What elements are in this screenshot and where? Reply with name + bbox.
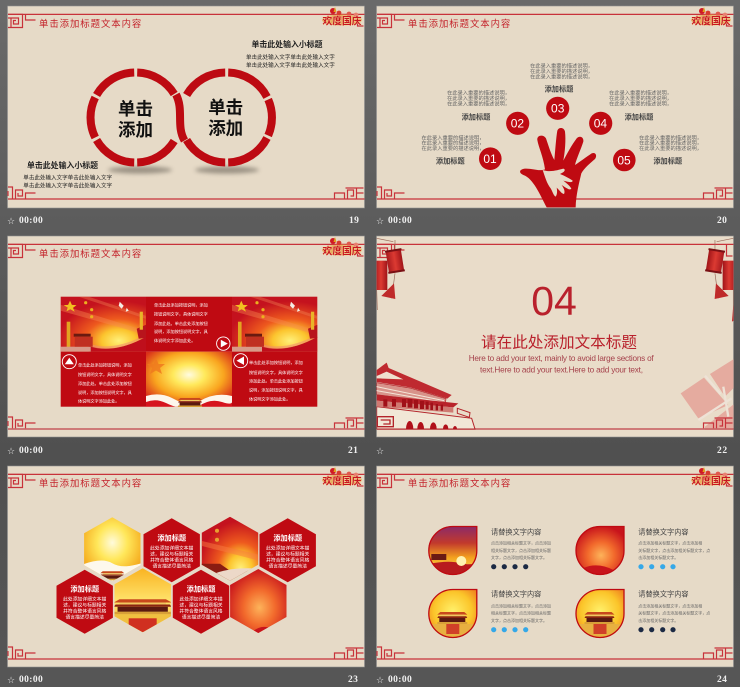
caption: ☆ [376,676,384,686]
text block 1: 点击添加相关标题文字，点击添加 [491,540,551,546]
step 03: 03 [551,102,565,116]
callout top right: 单击此处输入文字单击此处输入文字 [246,55,335,61]
icon: hand [520,128,596,207]
section description: text.Here to add your text.Here to add your text, [480,365,643,374]
frame border [377,474,734,659]
text block 4: 请替换文字内容 [638,590,689,598]
panel: slide 20 hand [376,6,734,227]
text block 1: 请替换文字内容 [491,528,541,536]
step 01 [479,147,502,170]
text cell top [146,297,232,352]
step 04: 04 [594,116,607,130]
ring 1 label: 添加 [118,120,153,140]
callout bottom left: 单击此处输入文字单击此处输入文字 [23,182,113,190]
hexagon text 2: 添加标题 [273,533,302,542]
frame border [8,474,364,659]
hexagon text 4: 添加标题 [187,585,215,594]
hexagon text 3: 此处添加详细文本描 [63,598,106,603]
star: ☆ [376,447,384,457]
step 02: 02 [511,116,524,130]
image center sun [146,352,232,407]
logo [322,7,362,28]
callout top right: 单击此处输入小标题 [252,39,323,49]
step 01: 01 [483,152,497,166]
text block 01: 在此录入重要的描述说明， [422,138,484,146]
caption [376,675,727,686]
text block 1: 相关标题文字，点击添加相关标题 [491,547,551,553]
text block 03: 在此录入重要的描述说明， [530,72,593,80]
text block 3: 请替换文字内容 [491,590,541,598]
caption [376,216,727,227]
step 04 [589,112,612,135]
callout bottom left: 单击此处输入文字单击此处输入文字 [23,176,112,182]
caption: ☆ [7,217,15,227]
text cell right: 说明，添加按钮说明文字，具 [249,386,303,392]
panel: slide 21 image grid [7,236,364,457]
image left [61,297,146,352]
text block 2: 关标题文字，点击添加相关标题文字，点 [638,547,710,553]
text cell top: 单击此处添加按钮说明，添加 [154,302,208,308]
drop image 4 [576,589,624,638]
title: 单击添加标题文本内容 [39,248,142,259]
hexagon text 1: 语言描述尽量简洁 [153,562,191,569]
text block 3: 相关标题文字，点击添加相关标题 [491,610,551,616]
text block 04: 在此录入重要的描述说明， [609,100,672,108]
caption [7,675,358,686]
hexagon text 4: 并符合整体语言风格 [179,608,223,615]
text block 02: 在此录入重要的描述说明， [447,90,510,96]
drop image 2 [576,526,624,575]
caption: 00:00 [19,216,43,226]
hexagon image 2 [201,516,259,582]
text cell left: 单击此处添加按钮说明，添加 [78,362,132,368]
text block 04: 在此录入重要的描述说明， [609,94,672,102]
hexagon text 1: 并符合整体语言风格 [150,556,193,563]
hexagon image 3 [114,567,172,633]
social icons 4 [638,627,676,632]
step 05 [613,149,636,171]
ring 2 label: 添加 [208,118,243,138]
text cell top: 说明，添加按钮说明文字，具 [154,328,208,334]
section heading: 请在此处添加文本标题 [481,334,637,352]
hexagon text 4: 述，建议与标题相关 [179,602,223,609]
caption: 24 [717,675,727,685]
callout bottom left: 单击此处输入小标题 [27,160,98,170]
social icons 2 [638,564,676,569]
illustration: Tiananmen gate [377,363,475,429]
text cell right: 体说明文字添加此处。 [249,396,290,402]
text block 2 [638,528,710,560]
text block 01: 在此录入重要的描述说明， [422,136,484,142]
label 03: 添加标题 [545,84,573,94]
step 05: 05 [617,153,631,167]
hexagon text 2 [260,518,316,582]
text block 2: 击添加相关标题文字。 [638,554,678,560]
text cell left [61,352,146,407]
panel: slide 23 hexagons [7,466,364,686]
text block 02: 在此录入重要的描述说明， [447,94,510,102]
icon: right arrow [217,337,230,350]
text block 01: 在此录入重要的描述说明， [422,144,484,152]
title: 单击添加标题文本内容 [408,18,511,29]
hexagon text 2: 述，建议与标题相关 [266,550,309,557]
title: 单击添加标题文本内容 [39,18,142,29]
text block 1: 文字，点击添加相关标题文字。 [491,554,547,560]
text block 4 [638,590,710,623]
panel: slide 22 section title [375,236,735,457]
label 02: 添加标题 [462,112,490,122]
callout bottom left [23,160,113,190]
caption: 23 [348,675,358,685]
big number: 04 [531,278,577,324]
text block 1 [491,528,551,560]
step 03 [546,97,569,120]
hexagon text 1: 此处添加详细文本描 [150,546,193,551]
caption: 21 [348,446,358,456]
logo [691,467,731,488]
text cell left: 添加此处。单击此处添加按钮 [78,380,132,386]
ring 2 label: 单击 [208,98,243,118]
hexagon image 4 [229,568,287,634]
hexagon text 2: 并符合整体语言风格 [266,556,309,563]
hexagon text 3: 语言描述尽量简洁 [66,614,104,621]
caption: 22 [717,446,728,456]
caption: 00:00 [388,675,412,685]
text block 05: 在此录入重要的描述说明， [639,136,702,142]
text block 03: 在此录入重要的描述说明， [530,64,593,70]
text cell right: 单击此处添加按钮说明，添加 [249,360,303,365]
caption: ☆ [7,447,15,457]
caption: 00:00 [19,446,43,456]
panel: slide 24 drops [376,466,734,686]
illustration: lanterns right [705,238,735,322]
text cell right: 按钮说明文字，具体说明文字 [249,369,303,375]
caption: 00:00 [388,216,412,226]
caption [7,216,359,227]
hexagon text 3: 并符合整体语言风格 [63,608,106,615]
ring 1 label: 单击 [118,99,153,119]
text block 3: 文字，点击添加相关标题文字。 [491,617,547,623]
icon: up arrow [62,355,76,369]
ring chart [91,72,272,174]
title: 单击添加标题文本内容 [408,478,511,488]
hexagon text 3 [56,570,113,634]
text block 3: 点击添加相关标题文字，点击添加 [491,604,551,608]
callout top right [246,39,335,69]
caption: ☆ [376,217,384,227]
callout top right: 单击此处输入文字单击此处输入文字 [246,61,335,69]
text block 2: 点击添加相关标题文字，点击添加相 [638,540,702,546]
text block 4: 关标题文字，点击添加相关标题文字，点 [638,610,710,616]
frame border [8,244,364,429]
hexagon text 3: 添加标题 [70,585,99,594]
panel: slide 19 infinity rings [7,6,364,227]
hexagon text 2: 此处添加详细文本描 [266,546,309,551]
frame border [377,244,734,429]
title: 单击添加标题文本内容 [39,478,142,488]
label 05: 添加标题 [653,156,682,166]
text block 4: 击添加相关标题文字。 [638,617,678,623]
logo [322,237,362,258]
text block 04: 在此录入重要的描述说明， [609,90,672,96]
social icons 1 [491,564,528,569]
section description: Here to add your text, mainly to avoid large sections of [469,354,654,363]
caption: ☆ [7,676,15,686]
hexagon text 3: 述，建议与标题相关 [63,602,106,609]
text cell left: 按钮说明文字，具体说明文字 [78,371,132,377]
step 02 [506,112,529,135]
text cell left: 体说明文字添加此处。 [78,398,119,404]
drop image 1 [428,526,477,575]
drop image 3 [428,589,477,638]
text block 05: 在此录入重要的描述说明， [639,144,702,152]
label 01: 添加标题 [436,156,465,166]
caption: 00:00 [19,675,43,685]
text cell left: 说明，添加按钮说明文字，具 [78,389,132,395]
text cell right [232,352,317,407]
text cell top: 添加此处。单击此处添加按钮 [154,320,208,326]
illustration: lanterns left [375,238,405,310]
hexagon text 2: 语言描述尽量简洁 [269,562,307,569]
text block 03: 在此录入重要的描述说明， [530,67,593,75]
logo [322,467,362,488]
hexagon text 4 [173,570,229,634]
icon: left arrow [234,354,248,368]
ring shadows [108,166,259,174]
frame border [8,14,364,199]
hexagon image 1 [83,516,141,582]
text block 4: 点击添加相关标题文字，点击添加相 [638,604,702,608]
hexagon text 1: 添加标题 [157,533,186,542]
label 04: 添加标题 [625,112,653,122]
text cell top: 按钮说明文字，具体说明文字 [154,310,208,316]
hexagon text 4: 此处添加详细文本描 [179,598,223,603]
hexagon text 1: 述，建议与标题相关 [150,550,193,557]
logo [691,7,731,28]
frame border [377,14,734,199]
text block 05: 在此录入重要的描述说明， [639,138,702,146]
text cell right: 添加此处。单击此处添加按钮 [249,378,303,384]
hexagon text 4: 语言描述尽量简洁 [182,614,220,621]
caption: 19 [349,216,359,226]
hexagon text 1 [144,518,200,582]
text block 02: 在此录入重要的描述说明， [447,100,510,108]
social icons 3 [491,627,528,632]
caption: 20 [717,216,727,226]
text block 3 [491,590,551,623]
text block 2: 请替换文字内容 [638,528,689,536]
text cell top: 体说明文字添加此处。 [154,337,195,343]
image right [232,297,317,352]
caption [7,446,358,457]
illustration: gift box [681,358,735,430]
